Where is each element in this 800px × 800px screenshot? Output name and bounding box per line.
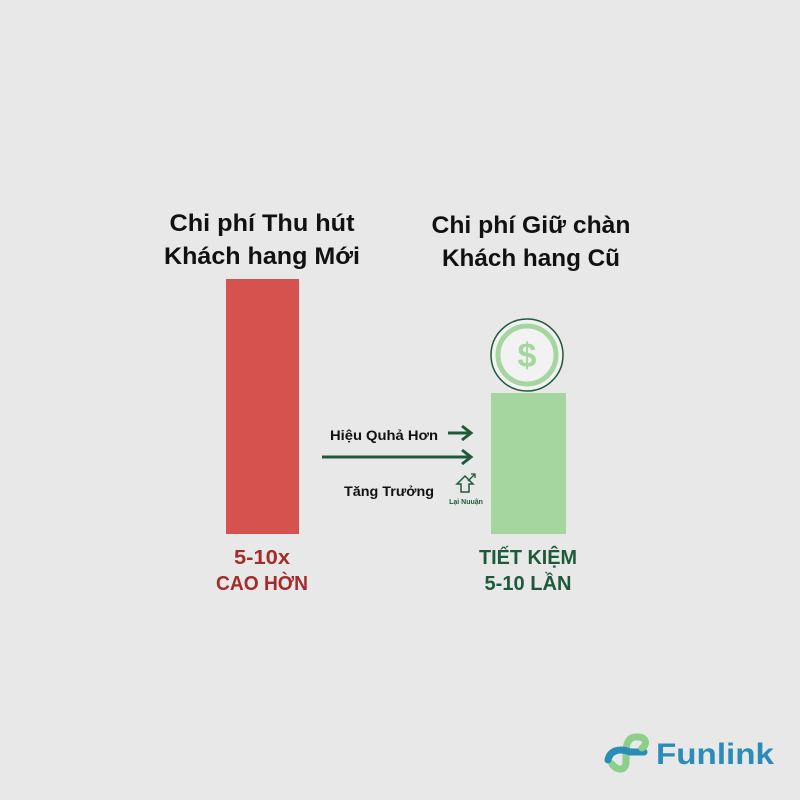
red bar — [226, 279, 299, 534]
label: green: TIẾT KIỆM — [479, 545, 577, 569]
icon: profit up arrow — [449, 474, 483, 506]
green bar — [491, 393, 566, 534]
title: right: Chi phí Giữ chàn — [432, 212, 630, 239]
title: right — [432, 212, 630, 272]
arrow: long — [322, 450, 471, 464]
title: right: Khách hang Cũ — [442, 245, 620, 272]
label: red — [216, 547, 308, 595]
label: green — [479, 545, 577, 595]
label: green: 5-10 LẦN — [484, 572, 572, 595]
label: red: 5-10x — [234, 547, 290, 569]
icon: dollar coin — [491, 319, 563, 391]
title: left: Khách hang Mới — [164, 243, 360, 270]
text: Tăng Trưởng: Tăng Trưởng — [344, 483, 434, 499]
icon: profit up arrow: Lại Nuuận — [449, 499, 483, 506]
logo: Funlink — [608, 737, 774, 771]
title: left: Chi phí Thu hút — [170, 210, 354, 237]
label: red: CAO HỜN — [216, 571, 308, 595]
arrow: Hiệu Quả Hơn — [330, 426, 471, 443]
title: left — [164, 210, 360, 270]
logo: Funlink: Funlink — [656, 738, 774, 771]
icon: dollar coin: $ — [518, 337, 537, 375]
arrow: Hiệu Quả Hơn: Hiệu Quhả Hơn — [330, 427, 438, 443]
